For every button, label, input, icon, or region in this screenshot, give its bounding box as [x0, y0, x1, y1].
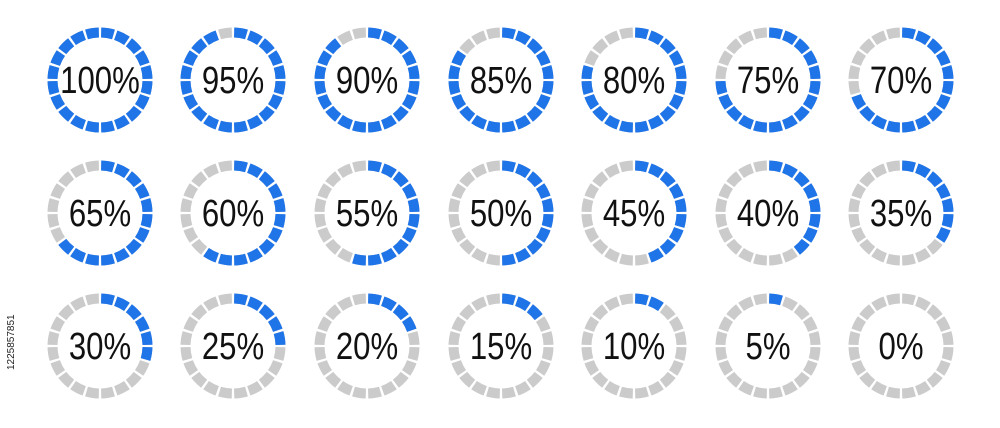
gauge 10%: [586, 298, 682, 394]
gauge 40%: [720, 166, 816, 260]
gauge 80%: [586, 32, 682, 128]
gauge 15%: 15%: [470, 326, 532, 368]
gauge 10%: 10%: [603, 326, 665, 368]
gauge 45%: 45%: [603, 193, 665, 235]
gauge 70%: 70%: [870, 60, 932, 102]
gauge 15%: [454, 298, 548, 394]
gauge 55%: [320, 166, 414, 260]
gauge 20%: 20%: [336, 326, 398, 368]
gauge 85%: 85%: [470, 60, 532, 102]
gauge 25%: [186, 298, 280, 394]
gauge 80%: 80%: [603, 60, 665, 102]
gauge 50%: 50%: [470, 193, 532, 235]
gauge 60%: 60%: [202, 193, 264, 235]
gauge 25%: 25%: [202, 326, 264, 368]
gauge 100%: [52, 32, 148, 128]
gauge 60%: [186, 166, 280, 260]
gauge 65%: [52, 166, 148, 260]
gauge 35%: 35%: [870, 193, 932, 235]
gauge 35%: [854, 166, 948, 260]
gauge 85%: [454, 32, 548, 128]
gauge 95%: 95%: [202, 60, 264, 102]
gauge 90%: [320, 32, 414, 128]
gauge 75%: [720, 32, 816, 128]
gauge 70%: [854, 32, 948, 128]
side id text: 1225857851: [6, 314, 17, 370]
gauge 95%: [186, 32, 280, 128]
gauge 100%: 100%: [60, 60, 140, 102]
gauge 40%: 40%: [737, 193, 799, 235]
gauge 5%: [720, 298, 816, 394]
gauge 55%: 55%: [336, 193, 398, 235]
gauge 75%: 75%: [737, 60, 799, 102]
gauge 20%: [320, 298, 414, 394]
gauge 45%: [586, 166, 682, 260]
gauge 90%: 90%: [336, 60, 398, 102]
gauge 0%: [854, 298, 948, 394]
gauge 5%: 5%: [745, 326, 791, 368]
gauge 50%: [454, 166, 548, 260]
gauge 30%: 30%: [69, 326, 131, 368]
gauge 65%: 65%: [69, 193, 131, 235]
gauge 0%: 0%: [878, 326, 924, 368]
gauge 30%: [52, 298, 148, 394]
